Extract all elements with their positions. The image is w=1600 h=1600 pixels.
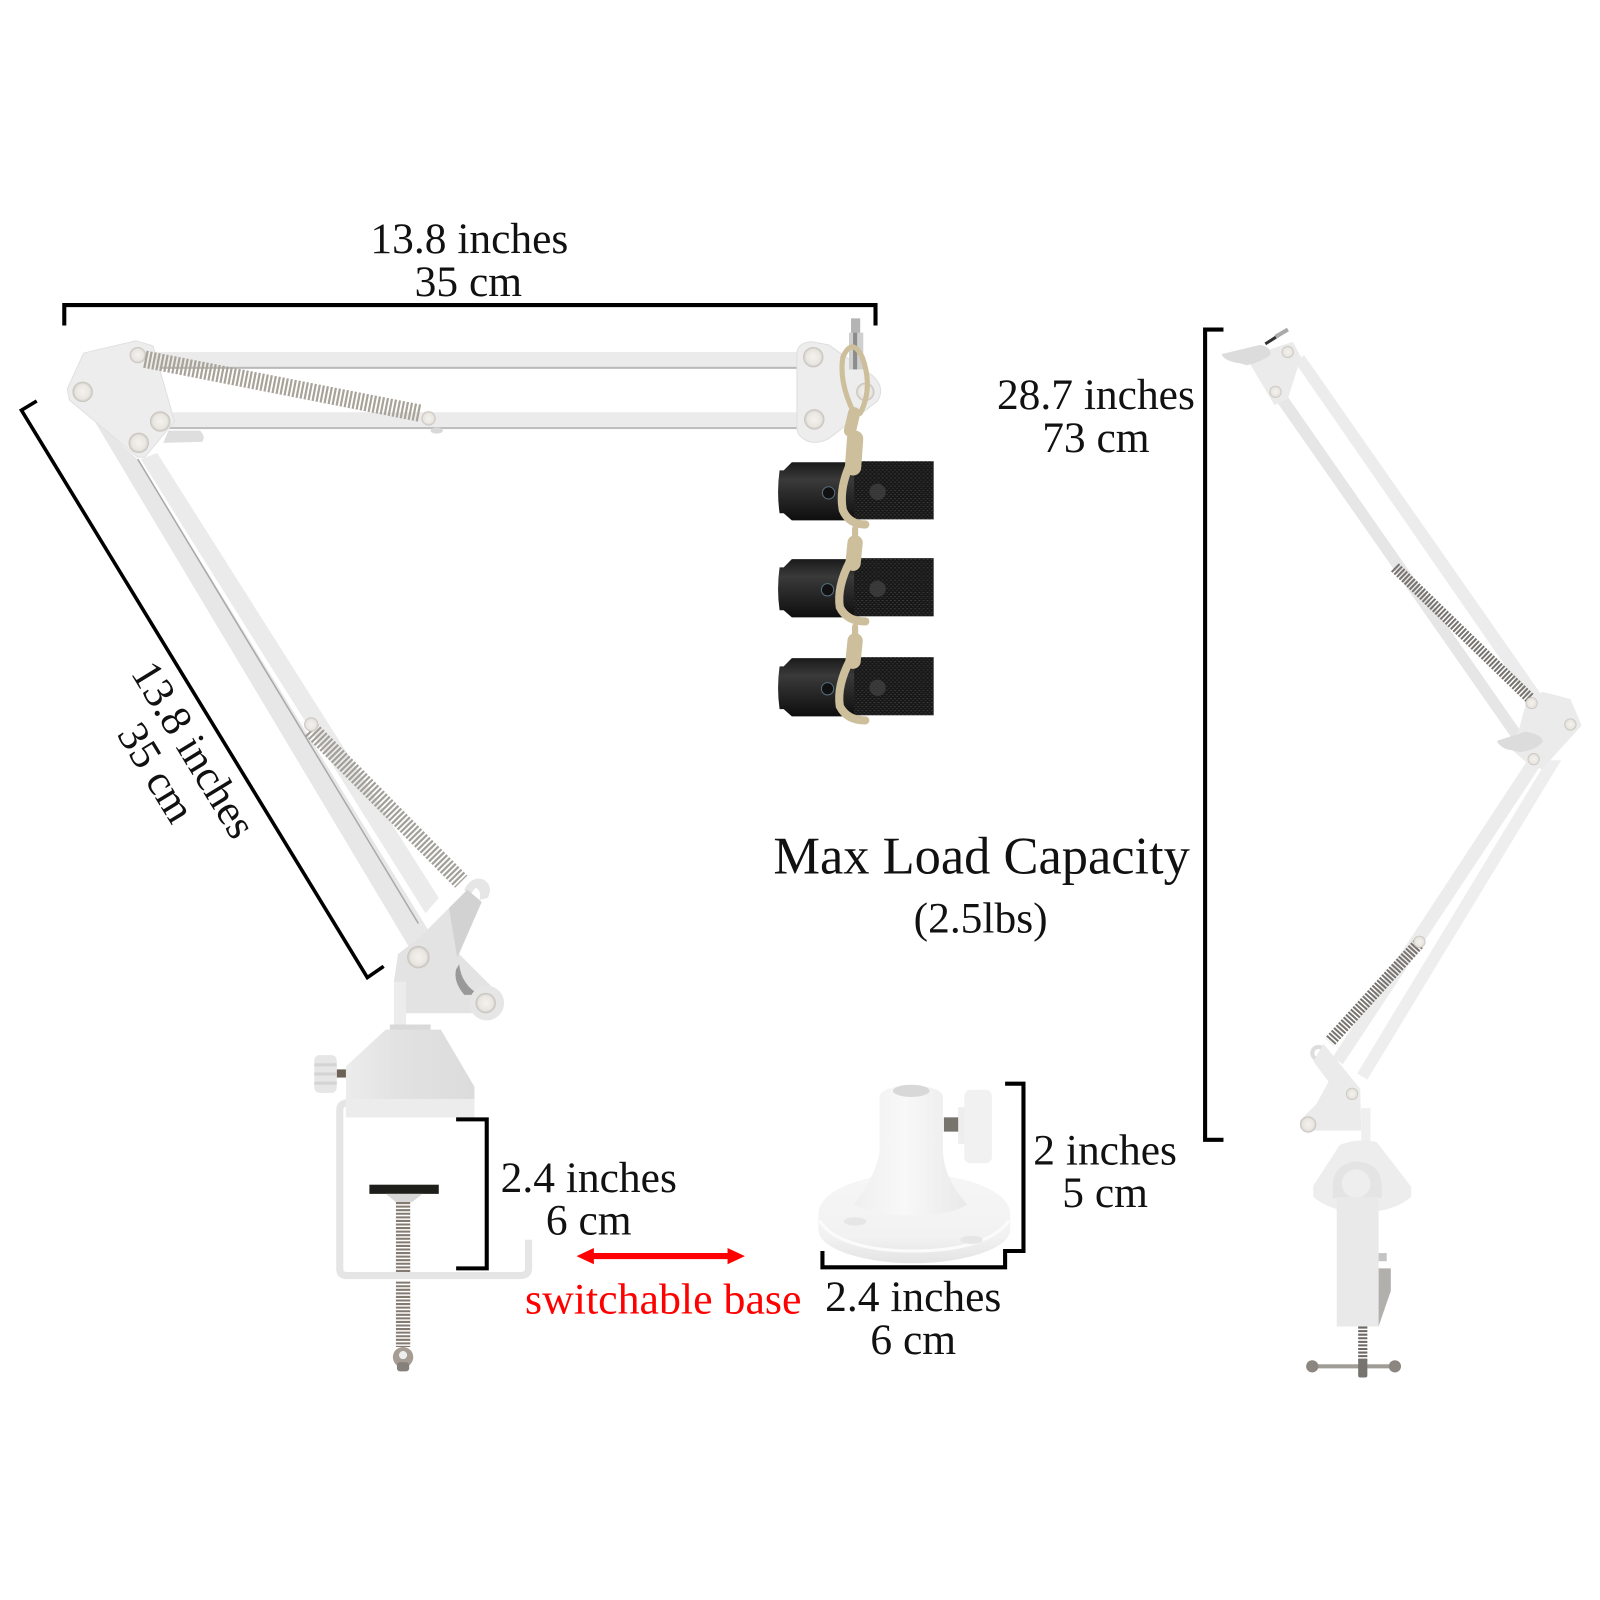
title: max load capacity <box>773 827 1191 943</box>
top bolt tip <box>1265 330 1288 344</box>
flange rim <box>819 1220 1009 1251</box>
lever under elbow <box>163 431 204 443</box>
dimension: total height label: 73 cm <box>1042 414 1150 462</box>
main boom arm, side view <box>67 318 881 1371</box>
base bolts <box>1300 1088 1358 1133</box>
dimension: flange height label: 5 cm <box>1062 1169 1148 1217</box>
dimension bracket: flange width and height <box>822 1084 1023 1267</box>
spring, front <box>1395 567 1530 698</box>
top lever <box>1221 345 1270 365</box>
lower spring, front <box>1330 944 1418 1042</box>
top bolts <box>1269 346 1294 398</box>
top plate <box>1246 342 1301 405</box>
flange disc <box>818 1173 1010 1263</box>
dimension bracket: total height <box>1205 330 1223 1140</box>
upper arm bars, front <box>1276 355 1541 739</box>
microphone 1 <box>778 461 934 520</box>
tip bolts <box>803 347 874 430</box>
switchable arrow <box>577 1248 745 1264</box>
spring on lower arm <box>311 730 461 882</box>
flange knob <box>944 1090 992 1163</box>
clamp arch <box>1333 1161 1382 1198</box>
clamp screw <box>369 1185 439 1371</box>
dimension: flange width label: 2.4 inches <box>825 1273 1001 1321</box>
clamp head, front <box>1313 1140 1411 1212</box>
clamp body, front <box>1337 1197 1379 1327</box>
dimension: clamp opening label: 2.4 inches <box>501 1154 677 1202</box>
spring hook <box>1312 936 1426 1059</box>
lower arm bars, front <box>1333 760 1561 1080</box>
threaded tip <box>849 318 863 369</box>
dimension: clamp opening label: 6 cm <box>546 1197 632 1245</box>
dimension: flange height label <box>1033 1126 1177 1217</box>
microphone 2 <box>778 558 934 617</box>
dimension bracket: top arm <box>64 305 876 326</box>
dimension bracket: lower arm <box>21 401 384 978</box>
microphones on rope <box>778 347 934 720</box>
T handle <box>1306 1327 1401 1378</box>
dimension: clamp opening label <box>501 1154 677 1245</box>
elbow plate <box>67 341 174 457</box>
elbow bolts <box>72 347 170 453</box>
front view boom arm <box>1221 330 1582 1378</box>
dimension bracket: clamp opening <box>456 1119 487 1268</box>
flange holes <box>844 1217 983 1244</box>
dimension: top arm length label: 35 cm <box>415 258 522 306</box>
clamp frame <box>340 1103 529 1276</box>
dimension: flange width label <box>825 1273 1001 1364</box>
clamp tab <box>1379 1253 1387 1261</box>
spring anchor <box>421 411 443 434</box>
lower arm bars <box>93 418 439 949</box>
microphone 3 <box>778 657 934 716</box>
dimension: flange height label: 2 inches <box>1033 1126 1177 1174</box>
tip plate <box>797 342 881 442</box>
alternate flange base <box>818 1085 1010 1263</box>
spring anchor lower <box>304 717 318 732</box>
title: max load capacity: (2.5lbs) <box>914 895 1048 943</box>
base plate, front <box>1300 1044 1361 1131</box>
neck opening <box>893 1085 930 1097</box>
upper arm bars <box>153 352 798 429</box>
dimension: lower arm length label: 13.8 inches <box>122 653 266 847</box>
post <box>1361 1108 1370 1142</box>
elbow plate, front <box>1513 692 1582 769</box>
dimension: total height label: 28.7 inches <box>997 371 1195 419</box>
clamp knob, front <box>1342 1169 1370 1198</box>
dimension: flange width label: 6 cm <box>870 1316 956 1364</box>
flange neck <box>853 1085 967 1216</box>
switchable base label: switchable base <box>525 1275 801 1323</box>
dimension: lower arm length label: 35 cm <box>108 714 205 831</box>
clamp knob <box>314 1055 346 1093</box>
dimension: top arm length label: 13.8 inches <box>370 215 568 263</box>
title: max load capacity: Max Load Capacity <box>773 827 1191 885</box>
clamp head <box>346 1024 474 1117</box>
base bracket of arm <box>394 879 504 1029</box>
rope and knots <box>839 347 867 720</box>
clamp jaw side <box>1379 1268 1391 1327</box>
elbow bolts <box>1526 697 1577 765</box>
spring on upper arm <box>145 359 420 413</box>
elbow lever <box>1497 732 1543 752</box>
dimension: top arm length label <box>370 215 568 306</box>
dimension: total height label <box>997 371 1195 462</box>
